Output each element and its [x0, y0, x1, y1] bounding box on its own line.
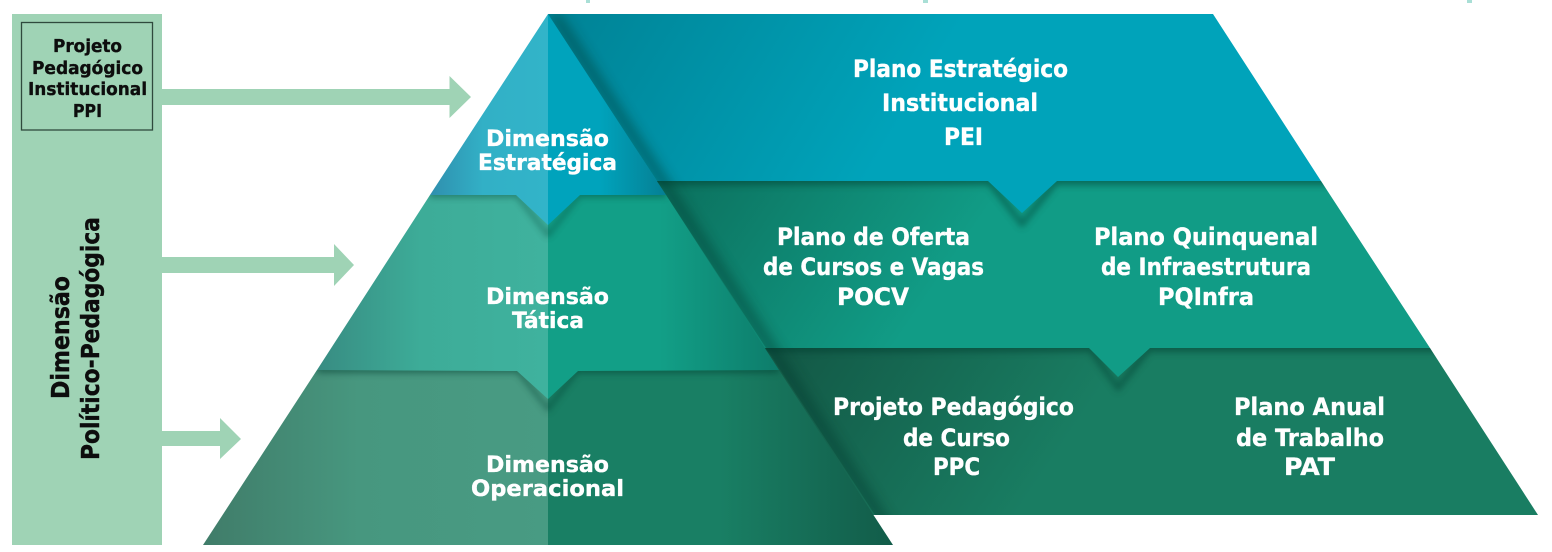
label: Plano de Oferta de Cursos e Vagas POCV: POCV: [837, 283, 909, 311]
label: Plano Quinquenal de Infraestrutura PQInfra: PQInfra: [1158, 283, 1254, 311]
box: Projeto Pedagógico Institucional PPI: PPI: [73, 101, 102, 122]
arrow: PPI to Dimensão Estratégica: [162, 76, 471, 118]
label: Plano Quinquenal de Infraestrutura PQInfra: de Infraestrutura: [1101, 253, 1311, 281]
box: Projeto Pedagógico Institucional PPI: Pedagógico: [32, 58, 143, 79]
shadow of pyramid on right tiers: [548, 14, 905, 545]
shadow under Dimensão Tática tier: [316, 370, 780, 412]
arrow: to Dimensão Operacional: [162, 418, 241, 459]
label: Projeto Pedagógico de Curso PPC: [833, 393, 1074, 481]
label: Plano de Oferta de Cursos e Vagas POCV: Plano de Oferta: [777, 223, 970, 251]
panel: Plano Estratégico Institucional tier: [548, 14, 1321, 213]
box: Projeto Pedagógico Institucional PPI: Institucional: [28, 79, 147, 100]
label: Dimensão Operacional: Operacional: [471, 476, 624, 502]
label: Dimensão Estratégica: [478, 126, 617, 176]
label: Dimensão Tática: [486, 284, 609, 334]
label: Dimensão Tática: Dimensão: [486, 284, 609, 310]
label: Projeto Pedagógico de Curso PPC: Projeto Pedagógico: [833, 393, 1074, 421]
label: Plano Anual de Trabalho PAT: [1234, 393, 1385, 481]
label: Plano Quinquenal de Infraestrutura PQInfra: Plano Quinquenal: [1094, 223, 1318, 251]
label: Plano Estratégico Institucional PEI: Institucional: [882, 89, 1038, 117]
pyramid: Dimensão Estratégica tier: [430, 14, 666, 225]
label: Plano de Oferta de Cursos e Vagas POCV: de Cursos e Vagas: [763, 253, 984, 281]
vertical label: Dimensão Político-Pedagógica: [46, 217, 105, 460]
pyramid: Dimensão Tática tier: [317, 195, 779, 399]
label: Plano Quinquenal de Infraestrutura PQInfra: [1094, 223, 1318, 311]
label: Plano Anual de Trabalho PAT: de Trabalho: [1236, 424, 1384, 452]
label: Projeto Pedagógico de Curso PPC: de Curso: [903, 424, 1010, 452]
label: Plano Estratégico Institucional PEI: PEI: [944, 123, 983, 151]
vertical label: Dimensão Político-Pedagógica: Dimensão: [46, 276, 75, 399]
panel: Plano Anual / Projeto Pedagógico de Curso tier: [700, 348, 1538, 515]
panel: Dimensão Político-Pedagógica: [12, 14, 162, 545]
shadow under top tier: [657, 181, 1326, 228]
label: Dimensão Operacional: Dimensão: [486, 452, 609, 478]
label: Dimensão Tática: Tática: [512, 308, 584, 334]
label: Dimensão Estratégica: Estratégica: [478, 150, 617, 176]
shadow under Dimensão Estratégica tier: [430, 190, 666, 238]
label: Plano Anual de Trabalho PAT: Plano Anual: [1234, 393, 1385, 421]
shadow under middle tier: [765, 348, 1434, 392]
label: Plano Anual de Trabalho PAT: PAT: [1284, 453, 1336, 481]
panel: Plano de Oferta / Plano Quinquenal tier: [600, 181, 1430, 377]
pyramid: Dimensão Operacional tier: [203, 370, 893, 545]
label: Plano de Oferta de Cursos e Vagas POCV: [763, 223, 984, 311]
vertical label: Dimensão Político-Pedagógica: Político-Pedagógica: [76, 217, 105, 460]
box: Projeto Pedagógico Institucional PPI: [22, 22, 152, 130]
box: Projeto Pedagógico Institucional PPI: Projeto: [53, 36, 122, 57]
label: Projeto Pedagógico de Curso PPC: PPC: [933, 453, 980, 481]
label: Dimensão Estratégica: Dimensão: [486, 126, 609, 152]
label: Dimensão Operacional: [471, 452, 624, 502]
label: Plano Estratégico Institucional PEI: [853, 55, 1068, 151]
faint cropped marks at top edge: [586, 0, 1472, 3]
arrow: to Dimensão Tática: [162, 244, 354, 286]
label: Plano Estratégico Institucional PEI: Plano Estratégico: [853, 55, 1068, 83]
